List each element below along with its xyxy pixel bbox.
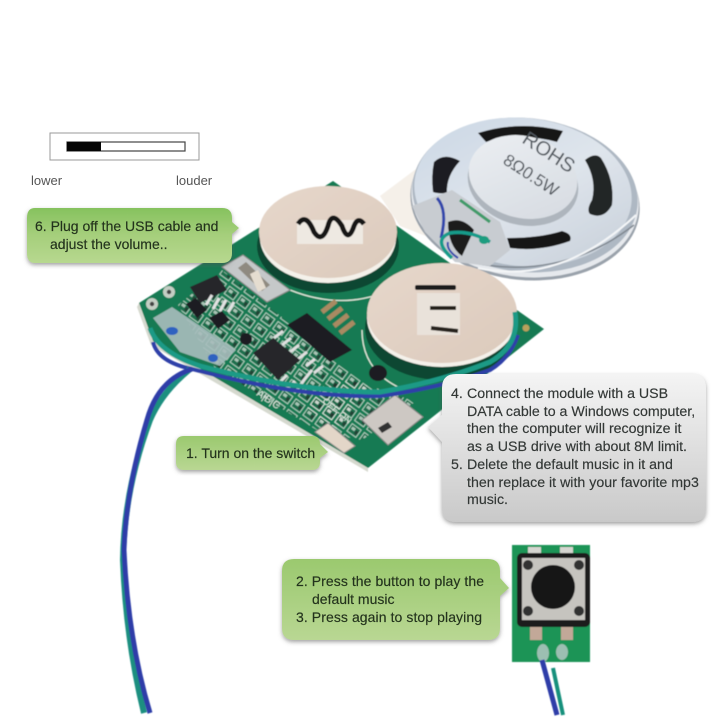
callout: steps 4 and 5: music. [467,492,508,508]
solder blob [153,307,236,366]
callout: steps 2 and 3: 3. Press again to stop playing [296,609,482,625]
PCB: OFF-ON [321,396,354,426]
callout: step 6: adjust the volume.. [50,236,168,252]
callout: step 6: 6. Plug off the USB cable and [35,218,218,234]
slide switch [222,255,290,302]
callout: step 1 [176,436,328,470]
volume scale: louder [176,173,213,188]
callout: steps 4 and 5: Delete the default music in it and [467,457,673,473]
board labels: A|B|C [254,388,282,412]
callout: steps 4 and 5: 5. [451,457,463,473]
tact button board [512,545,590,715]
resistor strip [322,301,354,333]
board chips [190,275,227,303]
paper backing behind speaker [380,166,436,240]
callout: step 6 [27,208,239,263]
board traces [290,290,385,301]
callout: steps 4 and 5: then replace it with your favorite mp3 [467,475,699,491]
coin cell 2 [365,263,517,380]
callout: steps 2 and 3 [282,559,509,640]
small white switch [315,423,355,453]
speaker [402,107,648,292]
mounting holes [146,286,530,332]
speaker solder joints [412,190,510,266]
photo: module with speaker and wires [123,107,648,715]
callout: steps 4 and 5: then the computer will recognize it [467,421,682,437]
speaker: 8Ω0.5W [500,150,562,200]
volume scale [31,133,213,188]
volume scale: lower [31,173,63,188]
callout: steps 2 and 3: default music [312,591,394,607]
callout: steps 4 and 5: as a USB drive with about 8M limit. [467,439,687,455]
callout: steps 4 and 5: Connect the module with a USB [467,386,668,402]
callout: steps 4 and 5 [428,374,706,522]
micro usb [362,395,423,445]
coin cell 1 [257,186,399,293]
speaker rim shading [470,225,634,267]
callout: steps 4 and 5: DATA cable to a Windows computer, [467,404,695,420]
PCB [137,181,544,472]
callout: step 1: 1. Turn on the switch [186,445,315,461]
callout: steps 2 and 3: 2. Press the button to play the [296,573,484,589]
callout: steps 4 and 5: 4. [451,386,463,402]
speaker: ROHS [518,128,579,178]
trailing wire [123,369,192,713]
wires on the module [150,312,518,396]
